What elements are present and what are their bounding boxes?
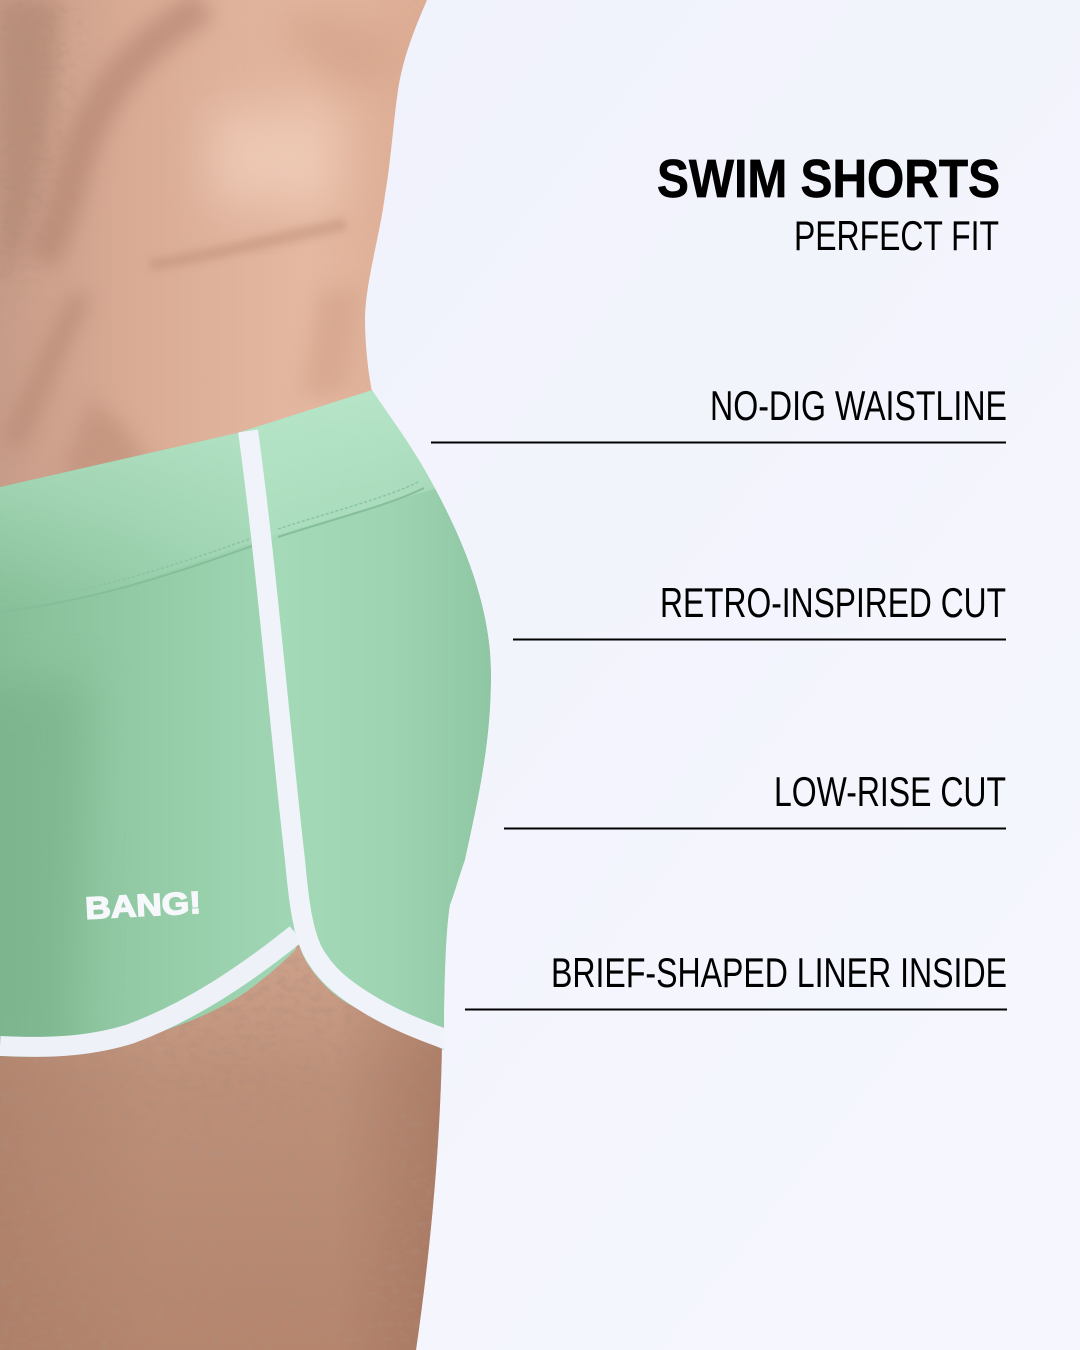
shorts: back panel xyxy=(237,390,491,1050)
title xyxy=(657,149,1000,259)
swim shorts xyxy=(0,390,500,1100)
shorts: lower left shading xyxy=(0,690,84,1057)
logo: BANG! xyxy=(84,885,202,926)
shorts: front panel xyxy=(0,432,296,1058)
shorts: waistband highlight xyxy=(0,390,435,570)
shorts: waistband seam xyxy=(70,487,424,600)
photo: torso xyxy=(0,0,440,500)
title: SWIM SHORTS xyxy=(657,149,1000,209)
feature: low-rise cut: LOW-RISE CUT xyxy=(774,768,1006,815)
subtitle: PERFECT FIT xyxy=(794,212,999,259)
shorts: white front hem piping xyxy=(0,934,296,1047)
shorts: white side piping xyxy=(248,431,448,1040)
photo: thigh xyxy=(0,930,450,1350)
